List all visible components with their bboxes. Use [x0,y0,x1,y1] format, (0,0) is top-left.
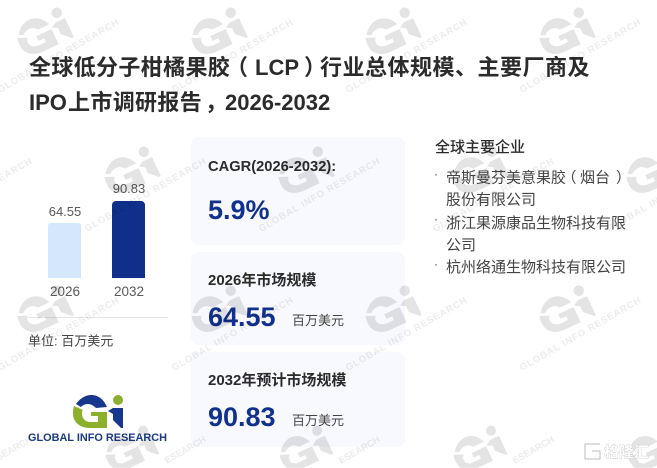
companies list: 股份有限公司 [446,192,536,208]
icon: Gi mark [73,395,123,428]
companies list: · [434,257,438,271]
companies list: 杭州络通生物科技有限公司 [446,259,626,276]
2026 unit: 百万美元 [292,313,344,328]
2026 value: 64.55 [208,302,276,332]
icon: corner G [585,444,600,459]
watermark pattern: GLOBAL INFO RESEARCH [170,295,295,374]
companies list: 帝斯曼芬美意果胶 [446,168,566,186]
axis labels: 2026 [50,284,80,299]
2026 label: 2026年市场规模 [208,271,316,289]
bar value labels [49,181,145,219]
title: LCP [255,55,299,80]
title: 行业总体规模、主要厂商及 [320,55,590,80]
watermark pattern: GLOBAL INFO RESEARCH [344,295,469,374]
axis labels [50,284,144,299]
title: （ [226,55,248,80]
logo wordmark: GLOBAL INFO RESEARCH [28,432,167,444]
2032 label: 2032年预计市场规模 [208,371,346,389]
logo: Global Info Research [28,395,167,444]
companies heading: 全球主要企业 [435,138,525,156]
companies list: 浙江果源康品生物科技有限 [446,215,626,232]
companies list: 公司 [446,237,476,254]
watermark pattern: GLOBAL INFO RESEARCH [518,17,643,96]
watermark pattern: GLOBAL INFO RESEARCH [518,295,643,374]
axis labels: 2032 [114,284,144,299]
companies list: （ [562,170,577,186]
title: ） [304,55,326,80]
title: 全球低分子柑橘果胶 [29,55,230,80]
2032 value: 90.83 [208,402,276,432]
companies list: ） [616,170,631,186]
bar value labels: 64.55 [49,204,81,219]
CAGR label: CAGR(2026-2032): [208,159,336,175]
watermark pattern: GLOBAL INFO RESEARCH [431,156,556,235]
companies list: · [434,167,438,181]
corner text: 格隆汇 [604,443,649,461]
bar: 2026 [48,223,81,278]
bar value labels: 90.83 [113,181,145,196]
watermark pattern: GLOBAL INFO RESEARCH [170,17,295,96]
panel: key companies [434,138,631,276]
corner mark: 格隆汇 [585,443,649,461]
watermark pattern: GLOBAL INFO RESEARCH [83,156,208,235]
unit note: 单位: 百万美元 [28,334,113,348]
title [29,55,590,115]
watermark pattern: GLOBAL INFO RESEARCH [344,17,469,96]
title: 2026-2032 [225,90,330,115]
panel: bar chart [28,181,168,348]
companies list: 烟台 [580,170,610,186]
CAGR value: 5.9% [208,195,270,225]
watermark pattern: ESEARCH [511,434,556,467]
watermark pattern: ESEARCH [163,434,208,467]
bar: 2032 [112,201,145,278]
companies list: · [434,212,438,226]
watermark pattern: GLOBAL INFO RESEARCH [257,156,382,235]
watermark pattern: ESEARCH [337,434,382,467]
companies list [434,167,631,276]
panel: 2026 market size [191,252,405,345]
panel: CAGR [191,137,405,245]
title: 上市调研报告 [68,90,202,115]
title: ， [205,90,227,115]
title: IPO [29,90,67,115]
panel: 2032 market size [191,352,405,447]
2032 unit: 百万美元 [292,413,344,428]
